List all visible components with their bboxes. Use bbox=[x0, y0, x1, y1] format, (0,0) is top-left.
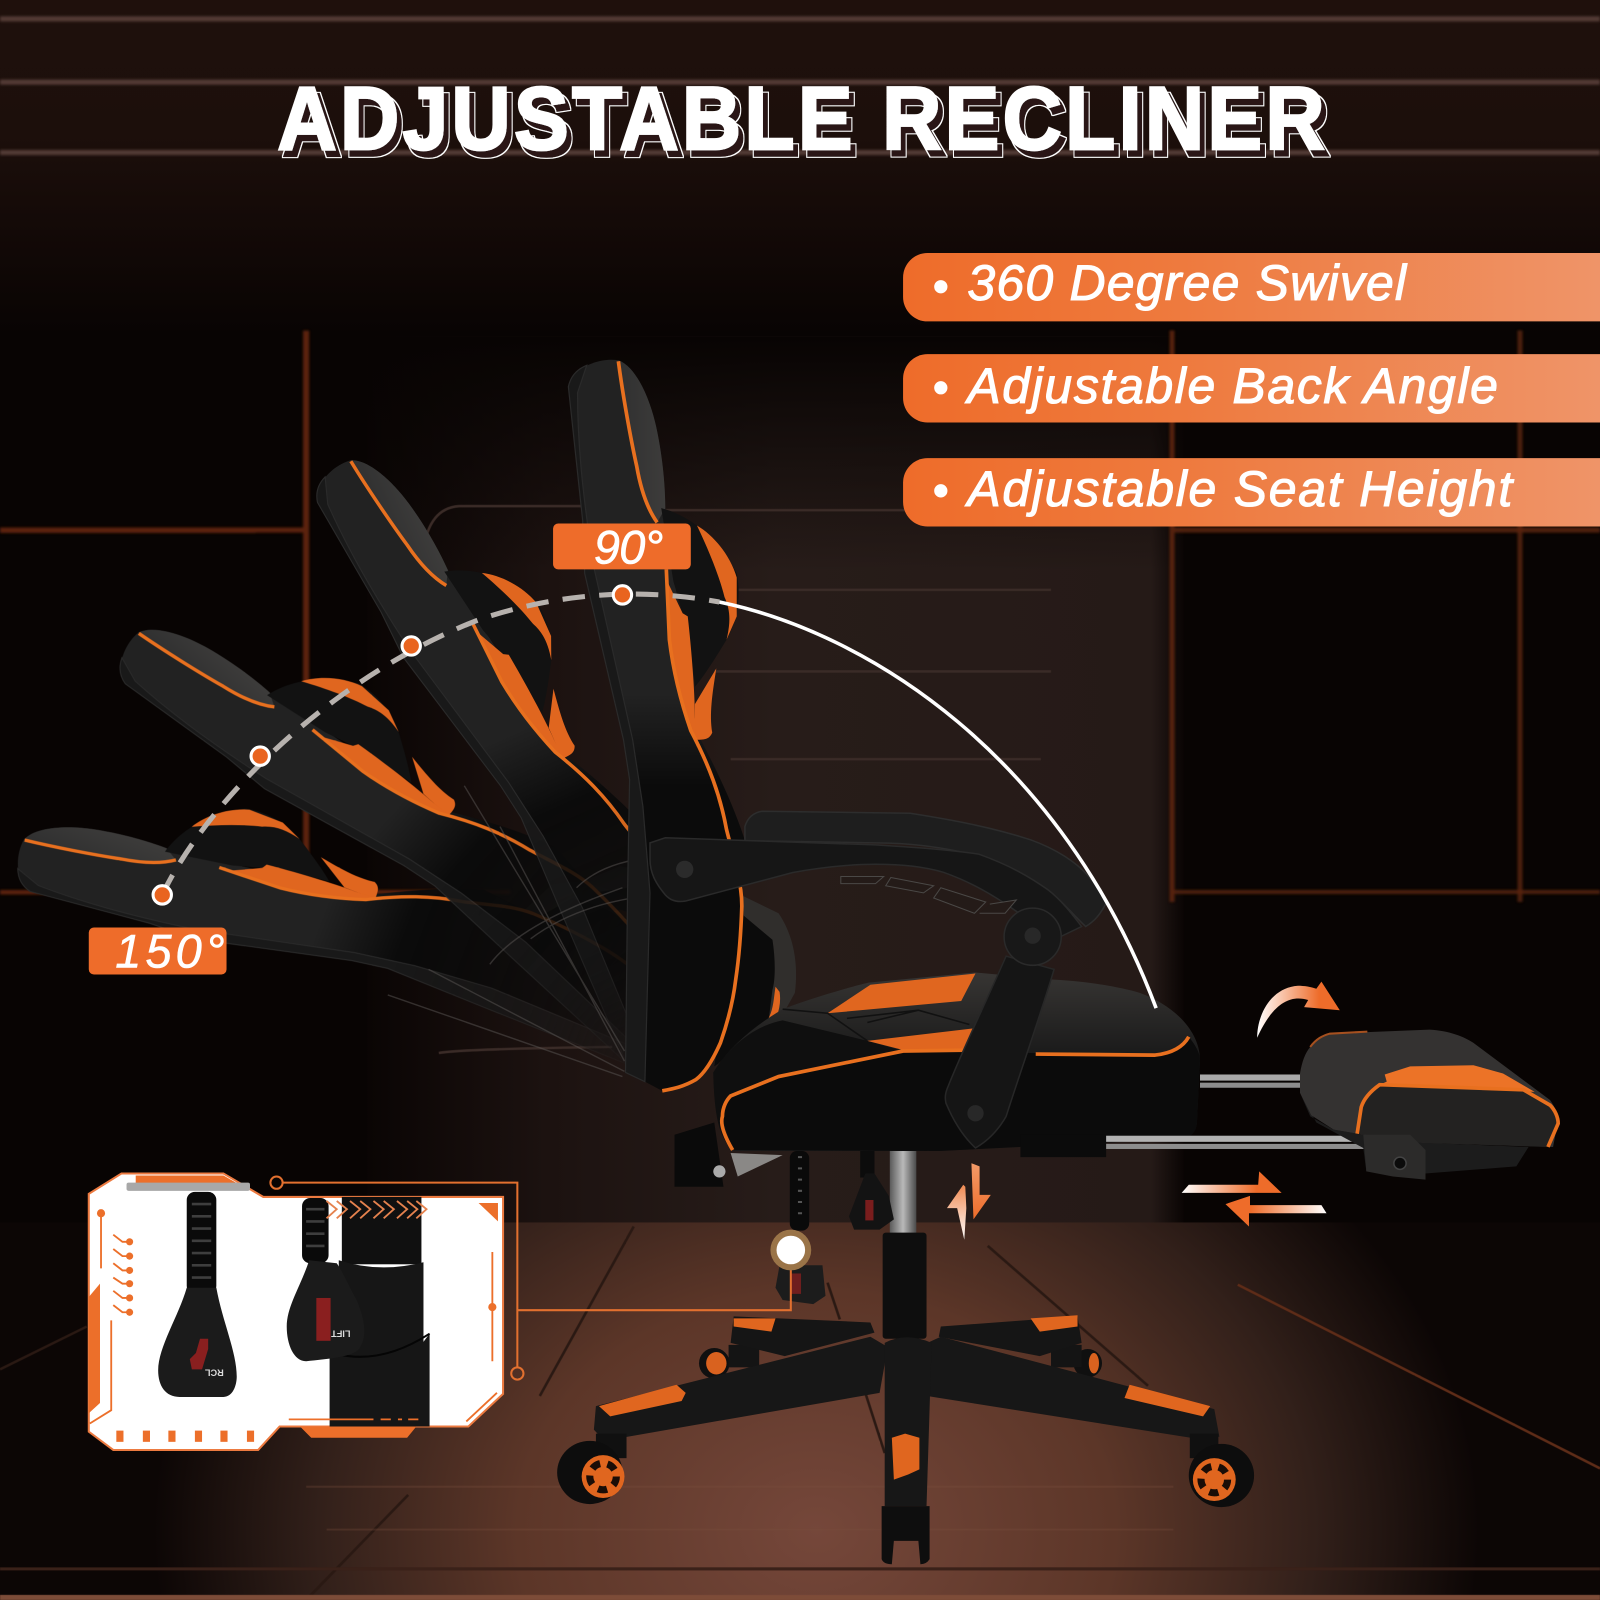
inset detail panel bbox=[89, 1173, 503, 1450]
recline lever detail: RCL bbox=[204, 1367, 224, 1377]
orange top accent bbox=[136, 1176, 245, 1188]
bottom orange accent bbox=[300, 1427, 416, 1438]
arm pad bbox=[745, 811, 1106, 927]
recline lever detail bbox=[158, 1192, 237, 1397]
recline lever bbox=[776, 1151, 826, 1304]
arm vents bbox=[841, 877, 1016, 913]
chevrons bbox=[327, 1201, 427, 1218]
left caster bbox=[557, 1434, 627, 1504]
rods bbox=[1020, 1074, 1365, 1157]
title: ADJUSTABLE RECLINER bbox=[278, 70, 1324, 169]
underside bbox=[1300, 1093, 1529, 1173]
reclined backrest, slight recline bbox=[316, 460, 628, 1026]
front legs bbox=[594, 1337, 1219, 1440]
arm post bbox=[945, 956, 1054, 1148]
arrow: footrest slide right bbox=[1182, 1171, 1282, 1193]
lift lever detail: LIFT bbox=[331, 1329, 350, 1339]
arm frame bbox=[650, 838, 1082, 939]
lever callout connector bbox=[270, 1177, 791, 1380]
seat cushion bbox=[713, 972, 1200, 1151]
back legs bbox=[731, 1316, 1082, 1356]
bracket bbox=[1363, 1135, 1426, 1180]
reclined backrest at 150 degrees bbox=[17, 808, 626, 1052]
label: 150 degrees: 150° bbox=[115, 925, 224, 977]
chair base and casters bbox=[557, 1151, 1254, 1564]
feature pill: adjustable seat height: Adjustable Seat Height bbox=[964, 461, 1514, 517]
feature pill: adjustable back angle: Adjustable Back Angle bbox=[964, 358, 1498, 414]
arrow: footrest flip bbox=[1257, 982, 1340, 1038]
feature pill: adjustable seat height bbox=[903, 458, 1600, 527]
panel circuit decoration bbox=[90, 1213, 497, 1423]
angle arc: solid part bbox=[719, 602, 1156, 1008]
feature pill: 360 degree swivel bbox=[903, 253, 1600, 321]
right caster bbox=[1189, 1434, 1254, 1507]
main backrest at 90 degrees bbox=[568, 360, 796, 1091]
footrest bbox=[1020, 1030, 1558, 1180]
angle arc: dashed part bbox=[162, 594, 719, 895]
reclined backrest, intermediate bbox=[119, 630, 627, 1030]
front caster bbox=[882, 1506, 930, 1564]
mechanism bracket bbox=[674, 1122, 783, 1187]
feature pill: adjustable back angle bbox=[903, 354, 1600, 422]
pillar bbox=[330, 1197, 430, 1427]
armrest bbox=[650, 811, 1106, 1148]
back casters bbox=[699, 1345, 1102, 1379]
rod bbox=[127, 1183, 250, 1191]
angle marker dots bbox=[153, 586, 632, 904]
cushion bbox=[1300, 1030, 1558, 1147]
gas lift cylinder bbox=[883, 1151, 927, 1339]
label: 90 degrees: 90° bbox=[594, 521, 663, 573]
ghost frame lines of reclined positions bbox=[388, 786, 653, 1077]
orange patch bbox=[1380, 1065, 1535, 1092]
arrow: seat height down bbox=[971, 1163, 991, 1219]
arrow: footrest slide left bbox=[1226, 1196, 1327, 1227]
callout ring on lever bbox=[770, 1230, 811, 1270]
label: 90 degrees bbox=[553, 521, 691, 573]
feature pill: 360 degree swivel: 360 Degree Swivel bbox=[967, 255, 1408, 311]
lift lever detail bbox=[287, 1198, 364, 1361]
arrow: seat height up bbox=[947, 1185, 966, 1240]
lift lever bbox=[849, 1151, 894, 1230]
